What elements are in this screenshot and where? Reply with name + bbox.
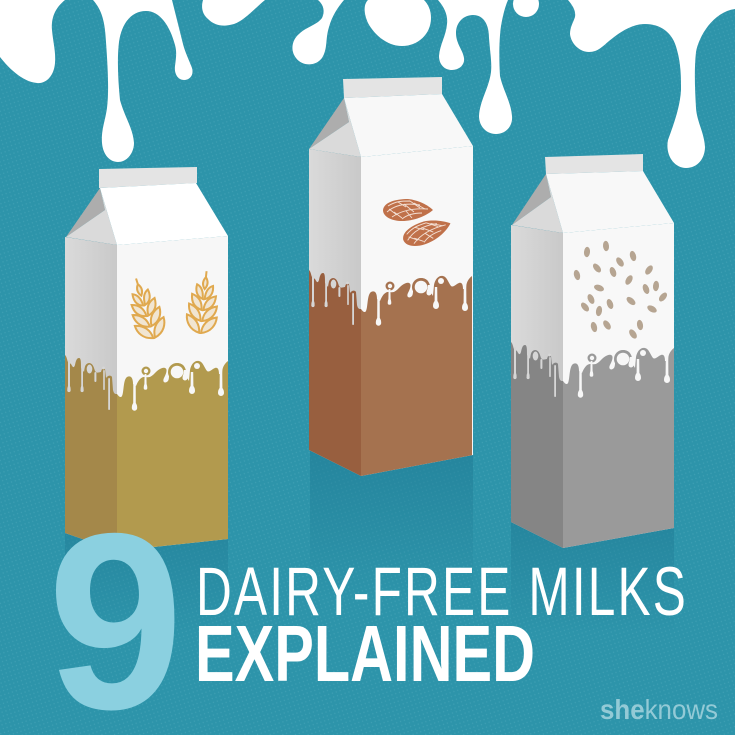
carton shadows (65, 430, 674, 635)
milk splash across the top (0, 0, 735, 168)
carton: almond milk (309, 77, 473, 505)
sesame carton front panel (563, 223, 674, 548)
carton: oat milk (65, 167, 228, 547)
icon: almonds (383, 199, 454, 250)
icon: wheat ears (122, 270, 221, 342)
icon: upper almond (383, 199, 433, 221)
logo: sheknows: sheknows (600, 694, 718, 725)
almond carton front panel (361, 146, 473, 476)
sesame carton side panel (511, 225, 563, 548)
oat carton roof (100, 183, 228, 245)
almond milk level (309, 270, 472, 476)
sesame carton gable (512, 174, 563, 233)
oat carton front panel (117, 236, 228, 551)
almond carton roof (344, 94, 473, 157)
icon: right wheat ear (185, 270, 221, 334)
oat carton flap (99, 167, 197, 188)
icon: left wheat ear (122, 274, 169, 342)
title line 2: EXPLAINED (195, 609, 535, 698)
sesame carton roof (546, 171, 674, 233)
carton: sesame milk (511, 154, 674, 577)
almond carton gable (309, 98, 361, 157)
sesame milk level (511, 342, 674, 548)
sesame carton flap (545, 154, 643, 174)
oat carton gable (66, 188, 117, 245)
almond carton side panel (309, 149, 361, 476)
almond carton flap (343, 77, 442, 98)
oat milk level (65, 355, 228, 547)
icon: sesame seeds (573, 241, 669, 340)
icon: lower almond (400, 214, 454, 250)
oat carton side panel (65, 237, 117, 551)
